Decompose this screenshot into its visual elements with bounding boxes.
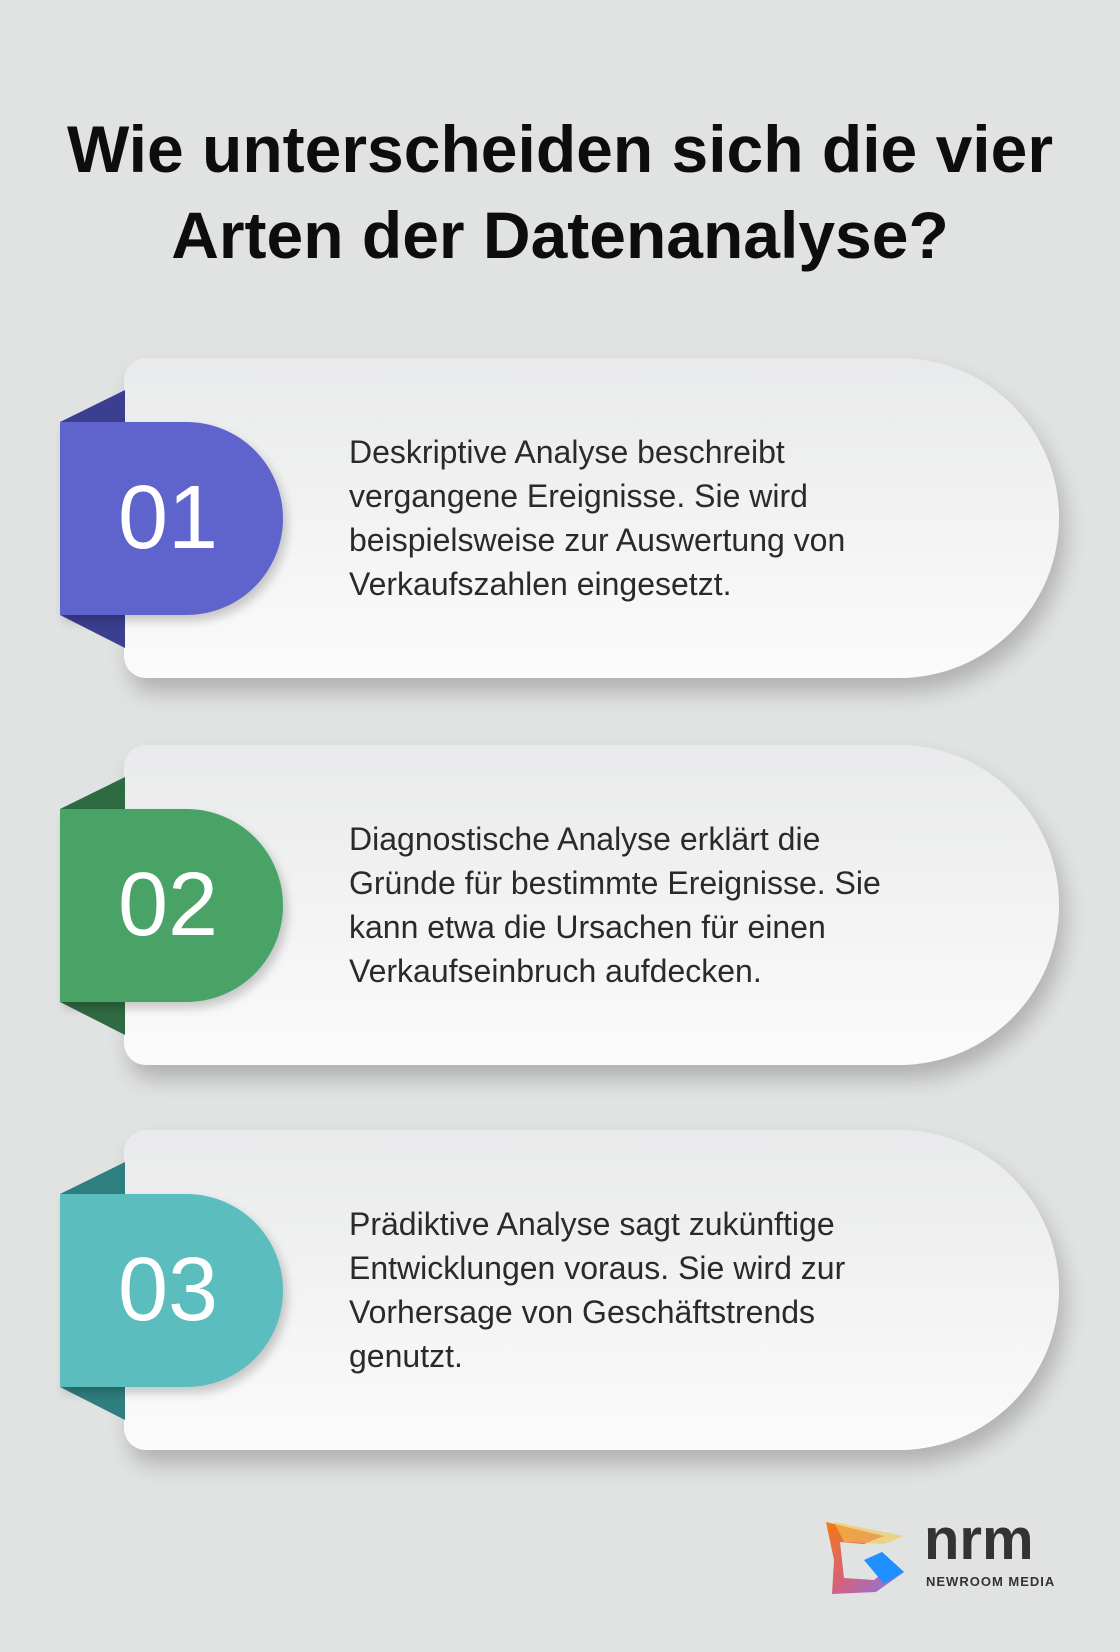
text 01: Verkaufszahlen eingesetzt. (349, 566, 731, 602)
text 02: Gründe für bestimmte Ereignisse. Sie (349, 865, 881, 901)
panel: 01 (60, 358, 1074, 702)
badge 01 (60, 422, 283, 615)
logo text: nrm (924, 1507, 1034, 1572)
fold 01 (60, 390, 125, 648)
logo: NEWROOM MEDIA (926, 1574, 1055, 1589)
text 03: genutzt. (349, 1338, 463, 1374)
text 02 (349, 821, 881, 989)
fold 02 (60, 777, 125, 1035)
badge 03: 03 (118, 1240, 218, 1340)
title: Arten der Datenanalyse? (171, 198, 949, 272)
title: Wie unterscheiden sich die vier (67, 112, 1053, 186)
badge 02 (60, 809, 283, 1002)
text 01: Deskriptive Analyse beschreibt (349, 434, 785, 470)
text 01: beispielsweise zur Auswertung von (349, 522, 845, 558)
fold 03 (60, 1162, 125, 1420)
icon: logo mark (826, 1522, 904, 1594)
text 02: Diagnostische Analyse erklärt die (349, 821, 820, 857)
badge 01: 01 (118, 468, 218, 568)
text 01: vergangene Ereignisse. Sie wird (349, 478, 808, 514)
text 02: kann etwa die Ursachen für einen (349, 909, 826, 945)
badge 03 (60, 1194, 283, 1387)
text 01 (349, 434, 845, 602)
title (67, 112, 1053, 272)
logo (826, 1507, 1055, 1594)
badge 02: 02 (118, 855, 218, 955)
card 01 (124, 358, 1059, 678)
text 03: Prädiktive Analyse sagt zukünftige (349, 1206, 835, 1242)
card 03 (124, 1130, 1059, 1450)
card 02 (124, 745, 1059, 1065)
text 03 (349, 1206, 845, 1374)
text 03: Vorhersage von Geschäftstrends (349, 1294, 815, 1330)
text 03: Entwicklungen voraus. Sie wird zur (349, 1250, 845, 1286)
text 02: Verkaufseinbruch aufdecken. (349, 953, 762, 989)
panel: 03 (60, 1130, 1074, 1474)
panel: 02 (60, 745, 1074, 1089)
